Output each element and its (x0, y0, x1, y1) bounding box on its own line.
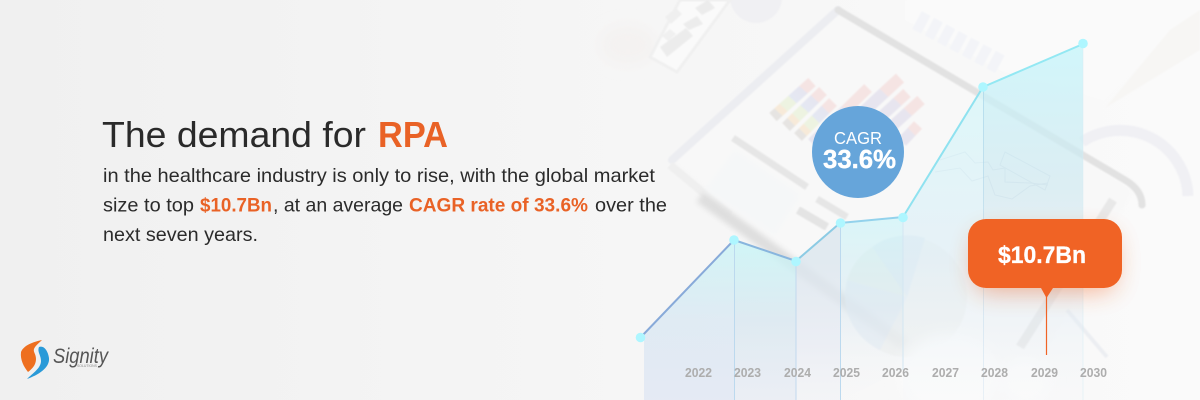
year axis labels: 2026 (882, 365, 909, 380)
year axis labels: 2028 (981, 365, 1008, 380)
tablet line chart (935, 152, 1050, 199)
logo mark: orange swoosh (21, 340, 42, 372)
market size callout (968, 219, 1122, 355)
body text (103, 165, 667, 246)
body text: $10.7Bn (200, 194, 272, 216)
title: RPA (378, 114, 448, 155)
background photo: tablet (670, 10, 1142, 400)
logo tagline: SOLUTIONS (77, 363, 97, 368)
body text: in the healthcare industry is only to rise, with the global market (103, 165, 656, 187)
market size callout: $10.7Bn (998, 242, 1086, 269)
logo mark: blue swoosh (27, 347, 49, 379)
year axis labels: 2030 (1080, 365, 1107, 380)
logo: Signity Solutions (21, 340, 109, 379)
year axis labels: 2027 (932, 365, 959, 380)
CAGR circle badge: 33.6% (823, 146, 896, 174)
year axis labels: 2022 (685, 365, 712, 380)
CAGR circle badge: CAGR (834, 128, 882, 148)
background photo: gauge (1067, 130, 1188, 357)
area fills per year (644, 44, 1083, 400)
year axis labels: 2024 (784, 365, 812, 380)
year axis labels: 2029 (1031, 365, 1058, 380)
year axis labels (685, 365, 1107, 380)
body text: , at an average (273, 194, 403, 216)
background photo: document with bars (905, 0, 1200, 108)
title: The demand for (102, 114, 366, 155)
body text: over the (595, 194, 667, 216)
trend line (640, 44, 1083, 338)
body text: size to top (103, 194, 194, 216)
data points (636, 39, 1088, 342)
background photo: calculator and hand (600, 0, 782, 72)
logo wordmark: Signity (53, 345, 109, 368)
year axis labels: 2025 (833, 365, 860, 380)
area chart with market growth (636, 39, 1088, 400)
tablet stacked bar chart (773, 78, 921, 143)
body text: CAGR rate of 33.6% (409, 194, 588, 216)
body text: next seven years. (103, 224, 258, 246)
background photo: pie chart, pen and hand (845, 200, 1113, 400)
year axis labels: 2023 (734, 365, 761, 380)
CAGR circle badge (812, 106, 904, 198)
